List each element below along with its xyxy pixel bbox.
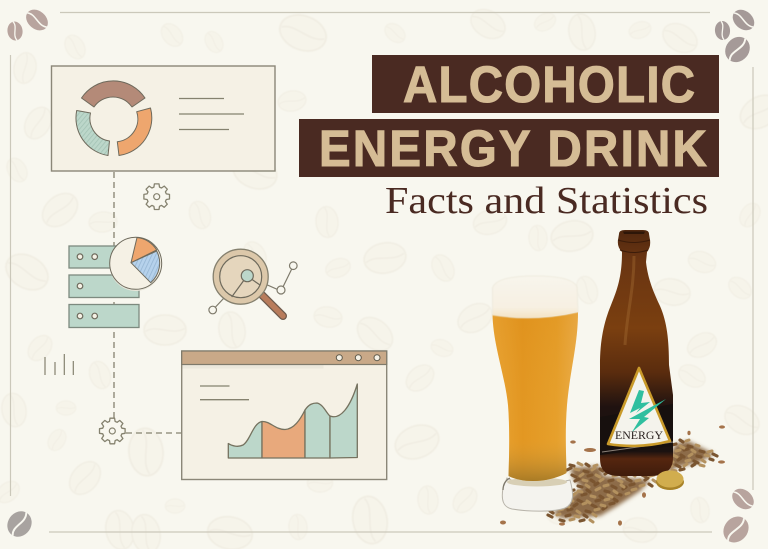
dark grains xyxy=(548,440,717,521)
grain pile xyxy=(548,440,717,522)
icon: server stack with pie chart xyxy=(69,237,162,328)
server lights xyxy=(77,254,97,319)
beer glass xyxy=(492,276,578,511)
title bar: energy drink: ENERGY DRINK xyxy=(319,120,707,177)
icon: coffee bean bottom left xyxy=(2,506,37,542)
subtitle: Facts and Statistics xyxy=(385,180,708,222)
foam xyxy=(492,276,578,318)
pie chart xyxy=(110,237,162,291)
icon: small bars xyxy=(45,354,73,375)
bottle cap xyxy=(656,470,684,490)
title bar: alcoholic: ALCOHOLIC xyxy=(403,56,695,113)
label text: ENERGY xyxy=(615,428,663,442)
donut chart xyxy=(76,81,152,156)
text placeholder lines xyxy=(179,98,244,130)
window header xyxy=(182,351,387,364)
panel: donut chart card xyxy=(52,66,275,171)
icon: magnifier with network nodes xyxy=(209,249,297,316)
bottle label: triangle xyxy=(608,368,670,446)
bottle xyxy=(600,230,673,476)
icon: coffee beans top left xyxy=(6,5,52,41)
server racks xyxy=(69,246,139,328)
glass base xyxy=(502,478,573,511)
connector end node xyxy=(204,429,211,436)
photo: beer and bottle xyxy=(492,230,725,526)
light grains xyxy=(557,440,712,522)
icon: coffee beans bottom right xyxy=(718,485,758,548)
area chart xyxy=(228,384,357,458)
beer xyxy=(492,312,578,481)
icon: small gear xyxy=(144,184,170,210)
dashed connector lines xyxy=(114,172,203,433)
stray grains xyxy=(500,425,725,526)
panel: browser window with area chart xyxy=(182,351,387,480)
icon: large gear xyxy=(100,418,125,444)
title block xyxy=(299,55,719,222)
text placeholder lines xyxy=(200,386,249,400)
icon: lightning bolt xyxy=(629,390,666,432)
icon: coffee beans top right xyxy=(714,6,758,67)
